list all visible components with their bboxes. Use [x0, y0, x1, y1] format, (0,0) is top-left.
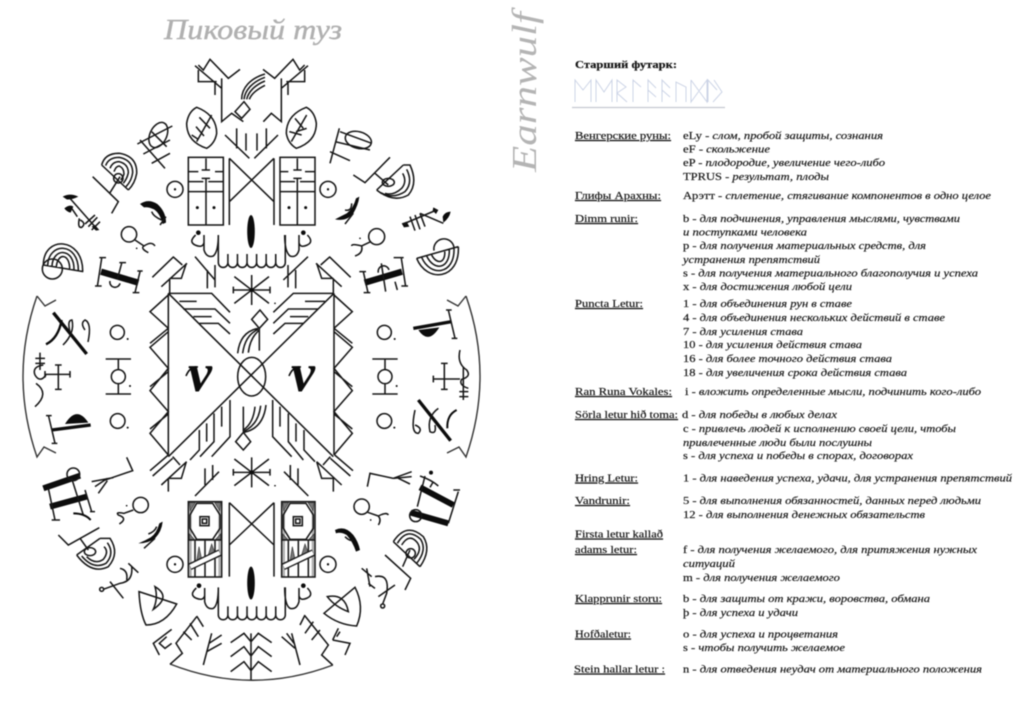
icon: right lower small circle	[377, 414, 395, 429]
text block: Dimm runir: x - для достижения любой цели	[683, 282, 852, 293]
icon: left zigzag	[150, 295, 168, 455]
icon: central oval	[238, 357, 266, 396]
text block: Hring Letur	[575, 474, 1013, 484]
icon: lower left target circle	[167, 556, 183, 572]
text block: Hungarian runes: eF - скольжение	[683, 144, 770, 156]
icon: left lower black glyph	[138, 522, 163, 548]
icon: left black glyph	[140, 201, 166, 225]
icon: lower right mid crown	[317, 455, 353, 492]
text block: Sorla letur	[575, 410, 956, 462]
panel: legend	[572, 60, 1013, 676]
text block: Hofdaletur: Hofðaletur:	[575, 630, 631, 640]
text block: Puncta Letur: 18 - для увеличения срока действия става	[683, 368, 907, 379]
text block: Klapprunir storu	[575, 594, 930, 619]
icon: lower right zigzag	[300, 615, 333, 665]
icon: right fish rune	[402, 207, 451, 231]
right top symbols	[254, 59, 458, 340]
text block: Klapprunir storu: b - для защиты от кражи, воровства, обмана	[683, 594, 930, 605]
icon: left circle with bars	[106, 359, 131, 394]
text block: Hofdaletur: o - для успеха и процветания	[683, 630, 838, 640]
icon: left thick rune	[95, 258, 143, 293]
icon: lower right square spiral	[333, 628, 350, 655]
icon: top right fork	[254, 128, 278, 158]
icon: left bind rune	[137, 119, 172, 168]
icon: lower left mid crown	[150, 455, 187, 492]
text block: Sorla letur: s - для успеха и победы в спорах, договорах	[683, 451, 913, 462]
text block: Hungarian runes: TPRUS - результат, плоды	[683, 172, 829, 183]
icon: left lower small circle	[110, 414, 129, 429]
icon: top black oval	[247, 215, 255, 248]
icon: upper feathers	[179, 301, 325, 334]
icon: right lower L rune	[367, 472, 412, 487]
text block: Hungarian runes	[575, 131, 885, 183]
icon: upper left rainbow arch	[93, 153, 137, 213]
icon: right rainbow arch	[417, 239, 458, 275]
icon: upper left fork	[195, 257, 215, 288]
icon: top left crown	[195, 59, 243, 122]
icon: right thorn rune	[413, 310, 457, 338]
icon: top mouth	[192, 230, 285, 267]
icon: top bowtie	[229, 158, 274, 225]
icon: central upper fan	[238, 310, 268, 353]
text block: Firsta letur: m - для получения желаемого	[683, 573, 840, 584]
icon: lower right fork upper	[284, 465, 308, 496]
text block: Puncta Letur: Puncta Letur:	[575, 299, 643, 310]
text block: Firsta letur: ситуаций	[683, 559, 736, 570]
outer bottom arc	[170, 664, 333, 680]
outer left arc	[23, 296, 56, 457]
text block: Stein hallar letur: Stein hallar letur :	[574, 664, 665, 676]
text block: Dimm runir: s - для получения материального благополучия и успеха	[683, 268, 978, 280]
text block: Sorla letur: привлеченные люди были послушны	[683, 438, 872, 449]
text block: Hring Letur: 1 - для наведения успеха, удачи, для устранения препятствий	[683, 474, 1013, 484]
text block: Dimm runir: Dimm runir:	[575, 214, 638, 225]
icon: upper right fork	[283, 257, 308, 288]
icon: futhark rune row	[575, 80, 722, 102]
text block: Dimm runir	[575, 214, 978, 293]
text block: Hofdaletur: s - чтобы получить желаемое	[683, 643, 845, 654]
icon: right circle with bars	[372, 359, 398, 394]
icon: bottom right curl	[285, 583, 311, 609]
icon: right mid crown	[316, 257, 351, 295]
text block: Arachne glyphs	[575, 191, 991, 202]
icon: lower feathers	[190, 400, 315, 462]
text block: Vandrunir	[575, 496, 981, 521]
text block: Dimm runir: b - для подчинения, управления мыслями, чувствами	[683, 214, 960, 225]
divider under runes	[572, 106, 725, 108]
icon: right thick rune	[359, 258, 408, 293]
icon: right zigzag	[334, 295, 352, 455]
icon: right black glyph	[335, 197, 359, 224]
icon: left lower L rune	[92, 457, 133, 493]
text block: Stein hallar letur: n - для отведения неудач от материального положения	[683, 664, 982, 676]
icon: top left fork	[225, 128, 249, 158]
panel: stave diagram	[23, 59, 480, 680]
text block: Firsta letur	[575, 530, 977, 584]
icon: lower left square spiral	[153, 629, 172, 655]
text block: Firsta letur: adams letur:	[575, 545, 637, 556]
icon: right cross with dollar knot	[433, 350, 468, 400]
icon: left Z rune	[46, 313, 89, 354]
icon: left rainbow arch	[42, 244, 83, 279]
icon: right leaf	[286, 107, 316, 148]
icon: top right curl	[285, 230, 311, 257]
text block: Vandrunir: Vandrunir:	[575, 496, 630, 507]
text block: Firsta letur: Firsta letur kallað	[575, 530, 663, 540]
icon: left thorn rune	[46, 414, 91, 443]
text block: Arachne glyphs: Глифы Арахны:	[575, 191, 661, 202]
text block: Ran Runa Vokales	[575, 387, 981, 398]
icon: lower left curl rune	[100, 563, 138, 598]
icon: right lower black glyph	[335, 528, 360, 552]
central frame	[150, 275, 352, 487]
icon: lower left zigzag	[170, 616, 203, 664]
text block: Puncta Letur	[575, 299, 945, 379]
icon: upper right panel	[280, 157, 315, 225]
icon: top fan	[242, 74, 265, 99]
icon: lower left patterned panel	[188, 502, 222, 577]
text block: Dimm runir: устранения препятствий	[682, 255, 821, 266]
text block: Arachne glyphs: Арэтт - сплетение, стягивание компонентов в одно целое	[683, 191, 991, 202]
text block: Hungarian runes: Венгерские руны:	[575, 131, 671, 142]
text block: Firsta letur: f - для получения желаемого, для притяжения нужных	[683, 545, 977, 556]
icon: right bind rune	[330, 128, 373, 163]
icon: left cross with dollar knot	[34, 353, 70, 407]
icon: right Z rune	[413, 400, 457, 441]
icon: left fish rune	[63, 195, 100, 231]
icon: left leaf	[187, 107, 217, 148]
icon: left target circle	[167, 181, 183, 197]
text block: Hring Letur: Hring Letur:	[575, 474, 638, 484]
text block: Hungarian runes: eLy - слом, пробой защиты, сознания	[683, 131, 883, 142]
text block: Puncta Letur: 7 - для усиления става	[683, 327, 803, 338]
icon: bottom bowtie	[229, 503, 274, 577]
left top symbols	[42, 59, 285, 354]
icon: bottom mouth	[192, 583, 285, 620]
text block: Vandrunir: 5 - для выполнения обязанностей, данных перед людьми	[683, 496, 981, 507]
text block: Sorla letur: d - для победы в любых делах	[682, 410, 837, 421]
left lower symbols	[34, 353, 285, 680]
icon: right small circle	[377, 325, 396, 340]
text block: Stein hallar letur	[574, 664, 982, 676]
icon: lower asterisk	[233, 457, 276, 487]
icon: lower right target circle	[320, 556, 336, 572]
text block: Dimm runir: p - для получения материальных средств, для	[683, 241, 926, 252]
text block: Klapprunir storu: þ - для успеха и удачи	[683, 608, 798, 619]
outer right arc	[447, 296, 480, 457]
icon: left mid crown	[152, 257, 187, 295]
icon: right loop rune	[352, 229, 385, 256]
icon: upper asterisk	[233, 275, 276, 305]
right lower symbols	[282, 350, 468, 665]
text block: Hofdaletur	[575, 630, 845, 654]
icon: right target circle	[320, 181, 336, 197]
text block: Vandrunir: 12 - для выполнения денежных обязательств	[683, 510, 925, 521]
icon: upper right rainbow arch	[353, 157, 414, 198]
author signature: Earnwulf	[505, 7, 544, 173]
icon: lower left fork	[203, 633, 222, 665]
icon: left loop rune	[121, 227, 155, 253]
icon: left bind rune letter: v	[188, 343, 213, 403]
icon: lower right fork	[282, 633, 300, 665]
icon: top right crown	[263, 59, 308, 122]
icon: lower left fork upper	[195, 465, 219, 496]
icon: bottom chevrons	[231, 633, 272, 680]
icon: central lower fan	[236, 405, 266, 450]
text block: Puncta Letur: 10 - для усиления действия става	[683, 340, 862, 351]
icon: right double thick rune	[410, 471, 460, 523]
text block: Puncta Letur: 4 - для объединения нескольких действий в ставе	[683, 313, 945, 324]
icon: main frame with crossing diagonals	[168, 293, 334, 457]
text block: Ran Runa Vokales: i - вложить определенные мысли, подчинить кого-либо	[685, 387, 981, 398]
icon: lower right curl rune	[362, 568, 395, 608]
text block: Dimm runir: и поступками человека	[683, 228, 807, 238]
text block: Puncta Letur: 1 - для объединения рун в ставе	[683, 299, 852, 310]
icon: top diamond	[235, 102, 250, 118]
icon: lower right fan	[324, 587, 360, 626]
icon: lower left fan	[139, 587, 177, 625]
icon: upper left panel	[188, 157, 223, 225]
text block: Klapprunir storu: Klapprunir storu:	[575, 594, 662, 605]
text block: Sorla letur: c - привлечь людей к исполнению своей цели, чтобы	[683, 424, 956, 435]
heading: elder futhark: Старший футарк:	[575, 60, 677, 71]
text block: Ran Runa Vokales: Ran Runa Vokales:	[575, 387, 672, 398]
icon: lower right rainbow arch	[385, 530, 427, 590]
text block: Sorla letur: Sörla letur hið toma:	[575, 410, 678, 421]
icon: lower left rainbow arch	[58, 528, 115, 569]
title: Пиковый туз	[163, 14, 342, 46]
icon: left double thick rune	[43, 468, 95, 520]
text block: Puncta Letur: 16 - для более точного действия става	[683, 354, 892, 365]
icon: right bind rune letter: v	[291, 343, 316, 403]
icon: left lower loop rune	[117, 497, 148, 524]
icon: left small circle	[110, 325, 129, 340]
text block: Hungarian runes: eP - плодородие, увеличение чего-либо	[683, 158, 885, 169]
icon: bottom black oval	[247, 566, 255, 600]
icon: lower right patterned panel	[282, 502, 315, 577]
icon: right lower loop rune	[354, 499, 388, 525]
